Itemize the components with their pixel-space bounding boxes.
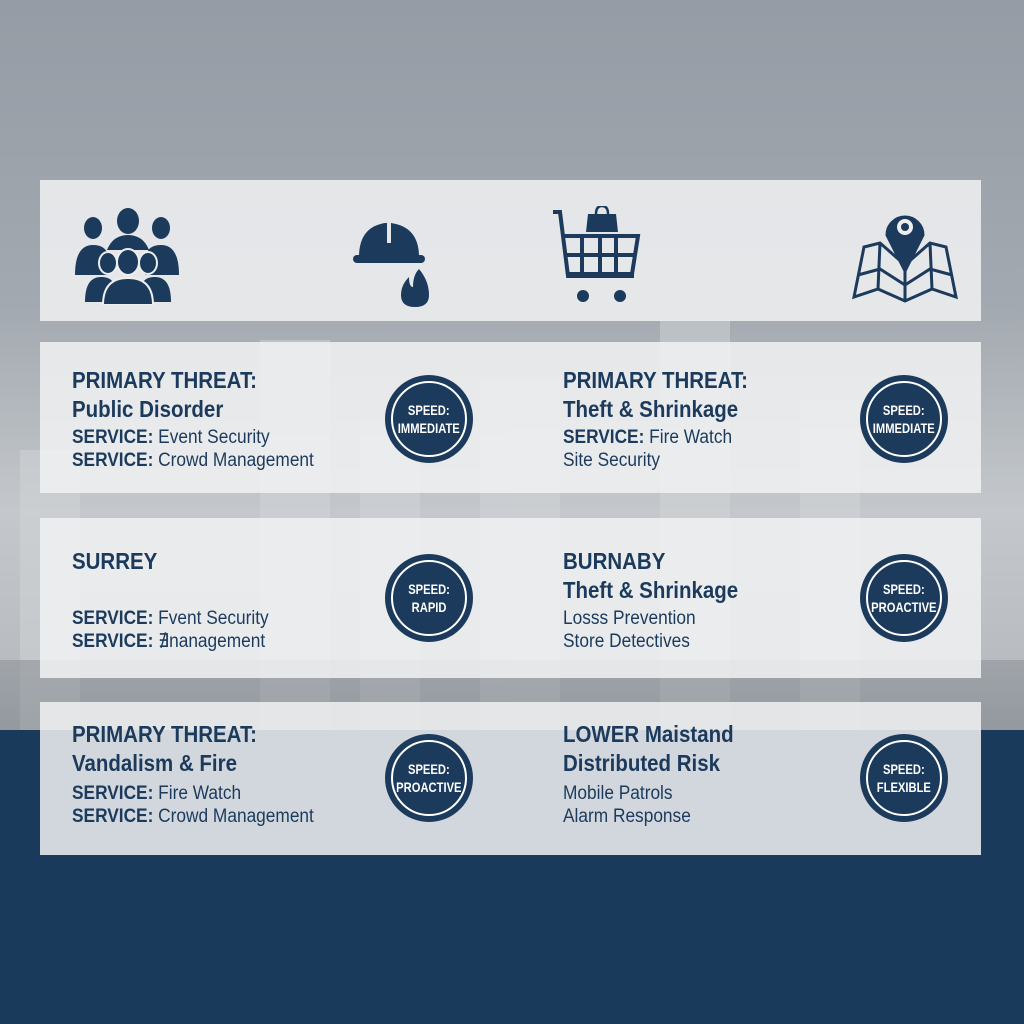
badge: FLEXIBLE — [877, 779, 931, 795]
text: burnaby — [563, 548, 738, 603]
badge: IMMEDIATE — [398, 420, 460, 436]
badge — [385, 554, 473, 642]
text: public disorder: Public Disorder — [72, 396, 223, 422]
panel: row 3: Alarm Response — [563, 806, 691, 827]
panel: row 1: Site Security — [563, 450, 660, 471]
panel: row 3: SERVICE: Crowd Management — [72, 806, 314, 827]
text: public disorder — [72, 367, 257, 422]
badge: SPEED: — [408, 761, 450, 777]
panel: row 3: Mobile Patrols — [563, 783, 673, 804]
text: public disorder: PRIMARY THREAT: — [72, 367, 257, 393]
badge: PROACTIVE — [871, 599, 937, 615]
badge: PROACTIVE — [396, 779, 462, 795]
badge — [860, 554, 948, 642]
panel: row 2: SERVICE: ∄nanagement — [72, 631, 265, 652]
text: lower mainland: LOWER Maistand — [563, 721, 734, 747]
text: lower mainland: Distributed Risk — [563, 750, 720, 776]
panel: row 2: Store Detectives — [563, 631, 690, 652]
panel: row 3: SERVICE: Fire Watch — [72, 783, 241, 804]
icon: cart — [553, 206, 640, 302]
badge: IMMEDIATE — [873, 420, 935, 436]
text: vandalism: PRIMARY THREAT: — [72, 721, 257, 747]
text: theft: PRIMARY THREAT: — [563, 367, 748, 393]
text: surrey: SURREY — [72, 548, 157, 574]
panel: row 1 — [40, 342, 981, 493]
text: vandalism: Vandalism & Fire — [72, 750, 237, 776]
badge: SPEED: — [883, 761, 925, 777]
city silhouette — [0, 321, 1024, 730]
icon: crowd — [75, 208, 179, 305]
icon: map pin — [852, 216, 958, 303]
panel: row 1: SERVICE: Fire Watch — [563, 427, 732, 448]
panel: row 1: SERVICE: Event Security — [72, 427, 270, 448]
panel: row 2 — [40, 518, 981, 678]
text: vandalism — [72, 721, 257, 776]
badge — [385, 375, 473, 463]
badge: RAPID — [412, 599, 446, 615]
panel: row 3 — [40, 702, 981, 855]
badge — [860, 375, 948, 463]
panel: row 1: SERVICE: Crowd Management — [72, 450, 314, 471]
panel: icons — [40, 180, 981, 321]
text: theft: Theft & Shrinkage — [563, 396, 738, 422]
panel: row 2: SERVICE: Fvent Security — [72, 608, 269, 629]
text: burnaby: Theft & Shrinkage — [563, 577, 738, 603]
panel: row 2: Losss Prevention — [563, 608, 696, 629]
icon: helmet fire — [353, 223, 429, 307]
badge: SPEED: — [883, 402, 925, 418]
badge — [860, 734, 948, 822]
badge: SPEED: — [883, 581, 925, 597]
text: burnaby: BURNABY — [563, 548, 665, 574]
text: lower mainland — [563, 721, 734, 776]
text: theft — [563, 367, 748, 422]
badge: SPEED: — [408, 402, 450, 418]
badge: SPEED: — [408, 581, 450, 597]
badge — [385, 734, 473, 822]
